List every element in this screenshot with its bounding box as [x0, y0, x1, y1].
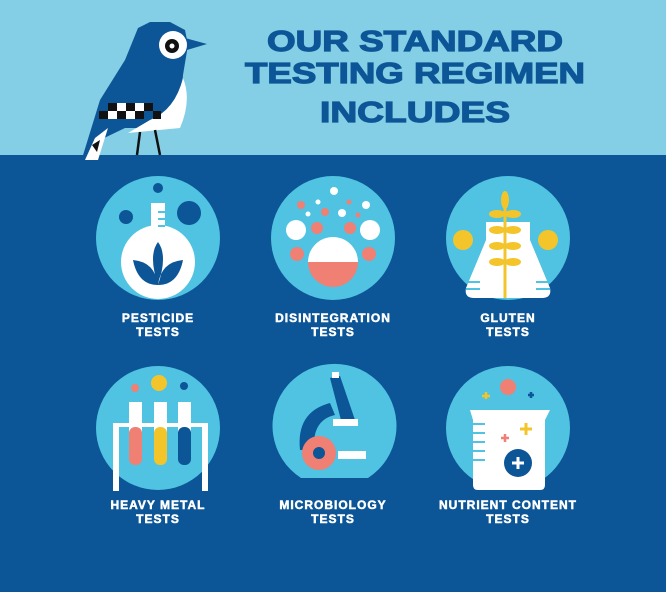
label: heavy metal	[110, 498, 206, 526]
label: nutrient content: NUTRIENT CONTENT	[439, 498, 577, 512]
label: heavy metal: HEAVY METAL	[110, 498, 206, 512]
label: pesticide	[122, 311, 194, 339]
panel: heavy metal	[96, 366, 220, 491]
label: pesticide: TESTS	[136, 325, 180, 339]
label: disintegration: TESTS	[311, 325, 355, 339]
icon: blue jay bird	[80, 22, 207, 165]
panel: disintegration	[271, 176, 395, 300]
title: TESTING REGIMEN	[245, 58, 585, 90]
title	[245, 26, 585, 129]
label: microbiology: MICROBIOLOGY	[279, 498, 387, 512]
label: microbiology	[279, 498, 387, 526]
label: gluten: TESTS	[486, 325, 530, 339]
panel: pesticide	[96, 176, 220, 300]
label: gluten	[480, 311, 536, 339]
label: disintegration: DISINTEGRATION	[275, 311, 391, 325]
label: nutrient content: TESTS	[486, 512, 530, 526]
label: microbiology: TESTS	[311, 512, 355, 526]
panel: microbiology	[272, 364, 396, 478]
label: gluten: GLUTEN	[480, 311, 536, 325]
label: nutrient content	[439, 498, 577, 526]
panel: gluten	[446, 176, 570, 300]
label: heavy metal: TESTS	[136, 512, 180, 526]
title: OUR STANDARD	[267, 26, 563, 58]
label: pesticide: PESTICIDE	[122, 311, 194, 325]
title: INCLUDES	[320, 97, 510, 129]
panel: nutrient content	[446, 366, 570, 490]
label: disintegration	[275, 311, 391, 339]
